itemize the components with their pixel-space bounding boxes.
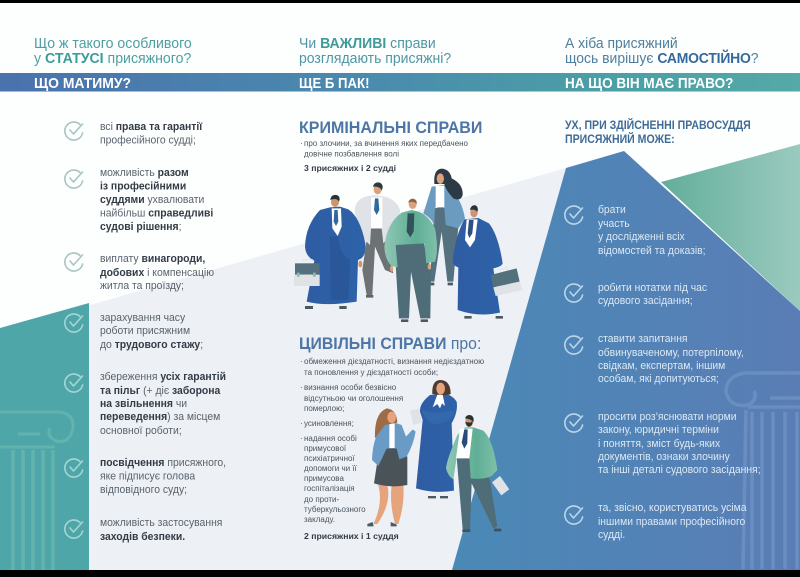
item 5: на звільнення чи [100,398,187,410]
heading column 1: Що ж такого особливого [34,36,192,52]
item 1: відомостей та доказів; [598,245,706,257]
civil cases list: госпіталізація [304,484,355,493]
item 5: іншими правами професійного [598,516,745,528]
illustration: three people [367,380,509,532]
icon: check 1 [65,122,83,140]
civil cases list: примусова [304,474,344,483]
civil cases list: · [300,434,303,443]
item 4: до трудового стажу; [100,339,203,351]
civil cases list: надання особі [304,434,357,443]
right column heading: ПРИСЯЖНИЙ МОЖЕ: [565,132,675,146]
item 3: свідкам, експертам, іншим [598,360,725,372]
civil cases list: обмеження дієздатності, визнання недієздатною [304,357,484,366]
item 2: робити нотатки під час [598,282,707,294]
item 3: ставити запитання [598,333,688,345]
item 3: обвинуваченому, потерпілому, [598,347,744,359]
item 5: та пільг (+ діє заборона [100,385,220,397]
item 5: переведення) за місцем [100,411,220,423]
criminal cases description: довічне позбавлення волі [304,150,399,158]
item 2: судові рішення; [100,221,182,233]
criminal cases description: про злочини, за вчинення яких передбачено [304,139,469,148]
icon: check 2 [565,284,583,302]
item 4: роботи присяжним [100,325,190,337]
icon: check 5 [565,506,583,524]
criminal composition: 3 присяжних і 2 судді [304,163,396,173]
person: green jacket man [384,199,437,322]
civil cases list: допомоги чи її [304,464,358,473]
item 2: судового засідання; [598,295,693,307]
civil cases list: визнання особи безвісно [304,383,397,392]
civil cases list: психіатричної [304,454,355,463]
civil cases list: · [300,357,303,366]
civil composition: 2 присяжних і 1 суддя [304,531,399,541]
civil cases list: · [300,419,303,428]
item 4: і поняття, зміст будь-яких [598,438,721,450]
left column list [65,121,226,543]
item 3: добових і компенсацію [100,267,214,279]
right column heading: УХ, ПРИ ЗДІЙСНЕННІ ПРАВОСУДДЯ [565,119,751,132]
person: judge right with briefcase [453,205,522,319]
item 3: особам, які допитуються; [598,373,719,385]
illustration: five people [294,169,522,322]
right column list [565,204,761,541]
icon: check 3 [565,336,583,354]
right blue panel [452,151,800,570]
heading column 3: щось вирішує САМОСТІЙНО? [565,51,758,67]
item 4: зарахування часу [100,312,185,324]
heading: criminal cases: КРИМІНАЛЬНІ СПРАВИ [299,118,482,137]
item 2: суддями ухвалювати [100,194,204,206]
item 1: у дослідженні всіх [598,231,685,243]
item 7: заходів безпеки. [100,531,185,543]
item 6: відповідного суду; [100,484,187,496]
black frame bottom [0,570,800,577]
civil cases list: · [300,383,303,392]
civil cases list: усиновлення; [304,419,354,428]
icon: check 1 [565,206,583,224]
item 4: та інші деталі судового засідання; [598,464,761,476]
bar label 3: НА ЩО ВІН МАЄ ПРАВО? [565,75,733,91]
person: bearded man [446,415,509,532]
civil cases list: закладу. [304,515,335,524]
civil cases list: та поновлення у дієздатності особи; [304,368,438,377]
person: judge left with briefcase [294,195,366,309]
right column pillar [726,373,800,569]
item 7: можливість застосування [100,517,222,529]
civil cases list: до проти- [304,495,340,504]
item 1: участь [598,218,630,230]
item 4: просити роз’яснювати норми [598,411,737,423]
civil cases list: відсутньою чи оголошення [304,394,403,403]
left column pillar [0,412,73,570]
item 5: та, звісно, користуватись усіма [598,502,746,514]
icon: check 2 [65,170,83,188]
item 4: документів, ознаки злочину [598,451,730,463]
item 1: всі права та гарантії [100,121,202,133]
icon: check 4 [565,414,583,432]
person: woman with skirt [367,408,422,526]
black frame top [0,0,800,3]
light background wedge [0,168,566,570]
item 1: професійного судді; [100,134,196,147]
right teal triangle [661,144,800,311]
header bar [0,73,800,92]
heading column 2: Чи ВАЖЛИВІ справи [299,36,436,52]
item 5: збереження усіх гарантій [100,371,226,383]
civil cases list: туберкульозного [304,505,366,514]
icon: check 6 [65,459,83,477]
icon: check 4 [65,314,83,332]
heading column 3: А хіба присяжний [565,36,678,52]
item 1: брати [598,204,626,216]
bar label 2: ЩЕ Б ПАК! [299,74,370,91]
left teal panel [0,303,89,570]
item 6: посвідчення присяжного, [100,457,226,469]
heading column 1: у СТАТУСІ присяжного? [34,51,191,67]
item 5: основної роботи; [100,425,182,437]
item 2: із професійними [100,180,186,193]
item 3: житла та проїзду; [100,280,184,292]
item 3: виплату винагороди, [100,253,205,265]
civil cases list: примусової [304,444,347,453]
item 6: яке підписує голова [100,470,195,483]
icon: check 3 [65,253,83,271]
item 4: закону, юридичні терміни [598,424,719,436]
criminal cases description: · [300,139,303,148]
icon: check 7 [65,520,83,538]
item 2: можливість разом [100,167,189,179]
bar label 1: ЩО МАТИМУ? [34,76,131,92]
person: grey jacket man [355,182,400,298]
person: woman judge [416,380,457,498]
heading: civil cases: ЦИВІЛЬНІ СПРАВИ про: [299,335,481,353]
heading column 2: розглядають присяжні? [299,51,451,67]
civil cases list: померлою; [304,404,344,413]
item 5: судді. [598,529,625,541]
item 2: найбільш справедливі [100,207,213,220]
person: woman with long hair [423,169,465,285]
icon: check 5 [65,374,83,392]
